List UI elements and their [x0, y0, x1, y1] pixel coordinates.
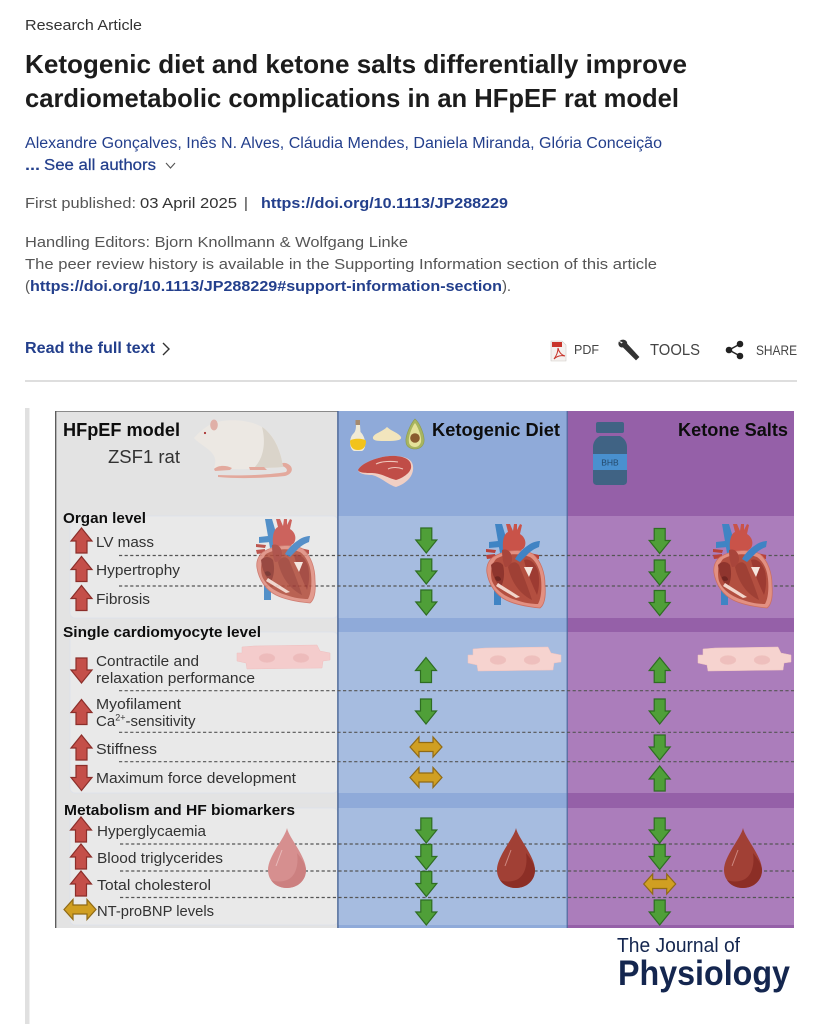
column headings: ZSF1 rat: [108, 447, 180, 467]
column headings: Ketogenic Diet: [432, 420, 560, 440]
icon: heart baseline: [256, 519, 315, 603]
journal logo: [617, 935, 790, 993]
icon: cardiomyocyte salts: [698, 647, 791, 671]
icon: BHB supplement bottle: [593, 422, 627, 485]
row: myofilament calcium sensitivity: [71, 696, 196, 730]
graphical abstract figure: [55, 411, 794, 928]
read the full text link: Read the full text: [25, 340, 155, 357]
row: contractile and relaxation performance: relaxation performance: [96, 670, 255, 687]
icon: mayonnaise: [373, 427, 401, 441]
row: NT-proBNP levels: NT-proBNP levels: [97, 903, 214, 920]
panel: ketone salts column: [567, 411, 794, 928]
salts cardiomyocyte effects: [649, 658, 670, 791]
row: hypertrophy: Hypertrophy: [96, 562, 181, 579]
row: LV mass: [71, 528, 154, 553]
publication date and DOI: |: [244, 195, 248, 212]
section: organ level: Organ level: [63, 510, 146, 527]
author list: Alexandre Gonçalves, Inês N. Alves, Cláudia Mendes, Daniela Miranda, Glória Conceição: [25, 135, 662, 152]
icon: cardiomyocyte ketogenic: [468, 647, 561, 671]
section: single cardiomyocyte level: [63, 624, 791, 791]
author list: See all authors: [44, 157, 156, 174]
toolbar: PDF, tools, share: PDF: [574, 342, 599, 357]
row: maximum force development: Maximum force development: [96, 770, 297, 787]
editors and peer review note: Handling Editors: Bjorn Knollmann & Wolfgang Linke: [25, 234, 408, 251]
author list: [25, 135, 662, 174]
row: contractile and relaxation performance: Contractile and: [96, 653, 199, 670]
icon: wrench: [619, 340, 639, 360]
column headings: [63, 420, 788, 467]
row: NT-proBNP levels: [64, 900, 214, 920]
toolbar: PDF, tools, share: [551, 340, 797, 361]
editors and peer review note: (: [25, 278, 30, 295]
publication date and DOI: https://doi.org/10.1113/JP288229: [261, 195, 508, 212]
keto metabolism effects: [416, 818, 437, 925]
row: fibrosis: [71, 586, 150, 610]
icon: heart salts: [713, 524, 772, 608]
editors and peer review note: [25, 234, 657, 295]
publication date and DOI: 03 April 2025: [140, 195, 237, 212]
row: myofilament calcium sensitivity: 2+: [115, 712, 125, 722]
row: hyperglycaemia: Hyperglycaemia: [97, 823, 207, 840]
editors and peer review note: The peer review history is available in the Supporting Information section of this article: [25, 256, 657, 273]
icons: ketogenic foods: [350, 419, 424, 487]
icon: steak: [358, 456, 413, 487]
article title: Ketogenic diet and ketone salts differentially improve: [25, 49, 687, 79]
row: total cholesterol: Total cholesterol: [97, 877, 211, 894]
row: stiffness: [71, 735, 157, 760]
article type label: Research Article: [25, 17, 142, 34]
toolbar: PDF, tools, share: SHARE: [756, 342, 797, 358]
row: hypertrophy: [71, 556, 181, 582]
panel: HFpEF model column: [55, 411, 338, 928]
icon: blood drop salts: [724, 828, 762, 888]
salts organ effects: [649, 528, 670, 616]
row: myofilament calcium sensitivity: -sensitivity: [125, 713, 196, 730]
row: hyperglycaemia: [70, 817, 207, 842]
journal logo: The Journal of: [617, 935, 740, 957]
row: fibrosis: Fibrosis: [96, 591, 150, 608]
keto cardiomyocyte effects: [410, 658, 442, 788]
keto organ effects: [416, 528, 437, 615]
section: metabolism and HF biomarkers: Metabolism and HF biomarkers: [64, 802, 295, 819]
icon: blood drop ketogenic: [497, 828, 535, 888]
publication date and DOI: [25, 195, 508, 212]
section: organ level: [63, 510, 772, 616]
icon: PDF: [551, 341, 566, 361]
salts metabolism effects: [644, 818, 676, 925]
toolbar: PDF, tools, share: TOOLS: [650, 342, 700, 359]
journal logo: Physiology: [618, 954, 790, 993]
icon: white rat: [194, 420, 292, 478]
article title: cardiometabolic complications in an HFpEF rat model: [25, 83, 679, 113]
publication date and DOI: First published:: [25, 195, 136, 212]
column headings: HFpEF model: [63, 420, 180, 440]
icon: oil bottle: [350, 420, 366, 451]
section: single cardiomyocyte level: Single cardiomyocyte level: [63, 624, 261, 641]
icon: heart ketogenic: [486, 524, 545, 608]
article title: [25, 49, 687, 113]
icon: blood drop baseline: [268, 828, 306, 888]
icon: avocado: [406, 419, 424, 449]
row: total cholesterol: [70, 871, 211, 896]
icon: share: [726, 341, 743, 359]
author list: ...: [25, 157, 40, 174]
editors and peer review note: https://doi.org/10.1113/JP288229#support-information-section: [30, 278, 502, 295]
row: myofilament calcium sensitivity: Myofilament: [96, 696, 182, 713]
row: blood triglycerides: Blood triglycerides: [97, 850, 223, 867]
icon: BHB supplement bottle: BHB: [601, 458, 619, 468]
row: stiffness: Stiffness: [96, 741, 157, 758]
row: blood triglycerides: [70, 844, 223, 869]
row: LV mass: LV mass: [96, 534, 154, 551]
row: contractile and relaxation performance: [71, 653, 255, 687]
section: metabolism and HF biomarkers: [64, 802, 762, 925]
panel: ketogenic diet column: [338, 411, 567, 928]
row: maximum force development: [71, 766, 297, 790]
column headings: Ketone Salts: [678, 420, 788, 440]
row: myofilament calcium sensitivity: Ca: [96, 713, 115, 730]
editors and peer review note: ).: [502, 278, 511, 295]
icon: cardiomyocyte baseline: [237, 645, 330, 669]
